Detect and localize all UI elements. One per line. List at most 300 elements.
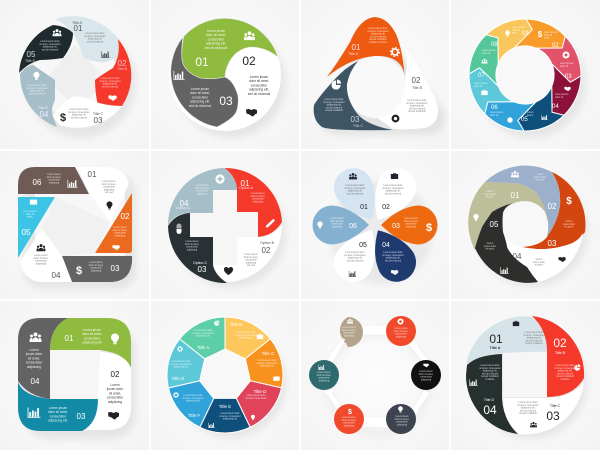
segment 02: Lorem ipsum dolor [100,77,120,80]
segment 01: tempor incididunt [525,342,543,345]
segment 02: sit amet, consectetur [554,367,576,370]
wedge texts and icons: Lorem ipsum dolor [246,394,266,397]
ring segments [457,7,593,143]
wedge titles: Title C [262,351,275,356]
petal texts: sed do eiusmod [347,193,364,195]
petal numbers [349,204,400,249]
petal texts [330,184,418,262]
segment 03 [168,213,227,283]
wedge texts and icons: sit amet, consectetur [256,362,278,365]
segment labels: 08 [491,42,498,48]
segment 01: Lorem [487,190,493,193]
segment 01: 01 [195,55,209,69]
icons and captions: dolor sit [544,34,552,37]
segment 02: sed do eiusmod [557,373,574,375]
node: slate: adipiscing [397,424,408,426]
segment 03: dolor sit amet, [185,243,200,246]
segment 02 [485,166,560,237]
segment 05: sit amet, [486,248,495,251]
petal numbers: 02 [382,204,390,211]
segment 01: 01 [489,332,503,346]
segment 02: sed do eiusmod [409,108,426,110]
segment 03: sit amet, [565,226,574,229]
segment 01: Lorem ipsum [102,180,116,183]
segment 03: Lorem ipsum [89,261,103,264]
segment 03: tempor incididunt [325,109,343,112]
segment 04: ipsum dolor [533,261,545,264]
segment 01: dolor sit amet, [206,33,226,37]
segment 01: 01 [74,24,83,33]
segment 06 [18,167,89,194]
segment 01: Lorem ipsum [251,192,265,195]
segment 03: Option C [193,261,207,265]
wedge titles: Title A [197,345,209,350]
icons and captions: Lorem ipsum [560,62,573,65]
panel: five-step pinwheel circle [19,16,136,138]
node: tan: dolor sit amet, [342,329,357,332]
panel: six-petal flower [312,161,438,289]
segment 03 [314,61,393,130]
node: slate [386,404,416,434]
segment 06: consectetur [48,179,60,182]
segment 03: Lorem ipsum [191,87,210,91]
icons and captions: $ [538,30,543,39]
segment 04: Lorem ipsum [34,254,48,257]
petal texts: dolor sit amet [330,220,344,223]
segment 02: 02 [111,370,120,379]
segment 01 [466,316,547,365]
segment 01: adipiscing elit, [88,38,103,41]
segment 06: 06 [33,178,42,187]
segment 01: consectetur [84,336,101,340]
segment 02: elit, sed [247,264,256,267]
icons and captions: ipsum [527,115,533,117]
wedge titles: Title F [188,413,200,418]
segment 01: Lorem ipsum dolor [85,32,105,35]
segment 05: 05 [27,50,36,59]
petal texts: sit amet, consectetur [382,254,404,257]
segment 04 [20,65,57,127]
segment 01: 01 [241,179,250,188]
segment 05: dolor sit [26,213,34,216]
segment 02: ipsum dolor [534,176,546,179]
segment 03: 03 [198,265,207,274]
wedge texts and icons: Lorem ipsum dolor [257,359,277,362]
segment 02: 02 [262,246,271,255]
petal texts: sed do eiusmod [347,260,364,262]
segment 02: sed do eiusmod [102,86,119,88]
segment 03: 03 [219,94,233,108]
segment 01: 01 [65,334,74,343]
segment 02: adipiscing [115,235,126,237]
segment 01 [468,182,549,250]
node: black: adipiscing [421,379,432,381]
segment 01: consectetur [208,37,225,41]
segment 02: Lorem ipsum dolor [407,99,427,102]
segment 03: Title C [550,404,561,408]
panel: three-step yin-yang circle [169,18,286,138]
petal texts: adipiscing elit, [386,257,401,260]
segment labels: 04 [552,104,559,110]
segment 02 [95,193,132,253]
segment 05: Title E [25,59,36,63]
petal numbers: 04 [382,242,390,249]
petal numbers: 06 [349,223,357,230]
petal icons: $ [426,222,432,234]
icons and captions: Lorem ipsum [555,93,568,96]
segment 04: consectetur [196,190,208,193]
segment 03: consectetur [192,95,209,99]
segment 04: sit amet, [535,264,544,267]
segment 04 [503,232,583,282]
petal texts: dolor sit amet [404,220,418,223]
panel: six-step rounded iris square [18,167,136,289]
node: tan: Lorem ipsum [342,326,356,329]
wedge texts and icons: Lorem ipsum dolor [171,360,191,363]
segment 04 [18,318,68,399]
petal texts: Lorem ipsum dolor [383,251,403,254]
panel: three-step rounded triangle [314,17,445,135]
petal texts: adipiscing elit, [386,190,401,193]
segment 01 [77,167,129,222]
segment 04: 04 [52,271,61,280]
segment 01: sit amet, consectetur [367,30,389,33]
segment 03: $ [566,196,572,207]
segment 03: 03 [548,239,557,248]
segment 01: Lorem ipsum [207,29,226,33]
segment 04: 04 [31,377,40,386]
segment 01: elit, sed [105,191,114,194]
wedge texts and icons: adipiscing elit, [260,365,275,368]
segment 03: sit amet, consectetur [68,111,90,114]
segment 01 [182,18,278,79]
segment 04: Lorem [29,348,39,352]
petal texts: adipiscing [406,226,417,228]
segment 05: sed do eiusmod [42,49,59,51]
segment 04: adipiscing elit, [30,90,45,93]
segment 02: 02 [553,336,567,350]
segment 02: dolor sit amet, [249,79,269,83]
wedge texts and icons: sit amet, consectetur [245,397,267,400]
segment 05: sit amet, consectetur [39,43,61,46]
segment 04: adipiscing [36,263,47,265]
segment 02: adipiscing elit, [410,105,425,108]
segment 01: sit amet, consectetur [523,334,545,337]
segment 01: Lorem ipsum dolor [368,27,388,30]
segment 01: Lorem ipsum [83,328,102,332]
segment 02: consectetur [251,83,268,87]
connecting arrows [324,322,431,430]
node: teal: Lorem ipsum [317,371,331,374]
segment 02: 02 [412,76,421,85]
segment 05: 05 [22,228,31,237]
segment 02: sed do eiusmod [248,92,270,96]
segment 02 [213,225,282,282]
segment 05: Lorem [487,242,493,245]
wedge texts and icons: Lorem ipsum dolor [193,329,213,332]
petal numbers: 05 [359,242,367,249]
wedge texts and icons: adipiscing elit, [196,335,211,338]
segment 03: $ [60,112,66,124]
node: teal: dolor sit amet, [317,374,332,377]
segment 02: adipiscing [246,262,257,264]
segment 01: 01 [352,43,361,52]
segment 01: adipiscing elit, [371,33,386,36]
petal texts: adipiscing elit, [348,190,363,193]
node: black: consectetur [420,376,432,379]
petals [312,161,438,289]
segment 04: adipiscing [197,193,208,195]
segment 01: adipiscing elit, [206,42,226,46]
wedge texts and icons [170,320,280,428]
segment 01: adipiscing [253,201,264,203]
segment 04: dolor sit amet, [195,187,210,190]
petal texts: consectetur [331,223,343,226]
petal texts: consectetur [405,223,417,226]
segment 03: Lorem [566,220,572,223]
segment 05: Lorem ipsum dolor [40,40,60,43]
segment 04: ipsum dolor [26,352,43,356]
segment 02: Option B [260,241,275,245]
segment 01: adipiscing elit, [527,337,542,340]
node: black: dolor sit amet, [419,373,434,376]
segment 04: adipiscing elit, [483,370,498,373]
segment 04: 04 [180,199,189,208]
segment 03: $ [76,265,82,277]
wedge texts and icons: sit amet, consectetur [170,363,192,366]
segment 01: adipiscing [104,189,115,191]
segment 01: dolor sit amet, [82,332,102,336]
segment 02: Lorem [110,383,120,387]
segment 02: 02 [118,59,127,68]
petal texts: sed do eiusmod [385,193,402,195]
segment 01: adipiscing elit [82,341,102,345]
segment 02 [169,19,281,131]
segment 03 [53,96,122,128]
segment 02: 02 [548,202,557,211]
petal texts: Lorem ipsum [330,217,344,220]
segment 03: Title C [353,124,364,128]
segment labels: 01 [522,31,529,37]
segment 03: consectetur [90,267,102,270]
segment 01: Title A [348,52,359,56]
segment labels: 06 [491,105,498,111]
icons and captions: dolor sit [474,85,482,88]
segment 01: dolor sit amet, [102,183,117,186]
wedge titles: Title E [219,404,231,409]
petal texts: sit amet, consectetur [344,254,366,257]
wedge texts and icons: sit amet, consectetur [192,332,214,335]
segment 02: adipiscing elit, [103,83,118,86]
segment 02: 02 [242,54,256,68]
panel: seven-wedge ring [158,303,299,447]
segment 04: 04 [40,110,49,119]
segment 02: dolor sit amet, [113,229,128,232]
node: red bottom: Lorem ipsum [342,416,356,419]
segment 01 [327,17,405,81]
segment 01: ut labore et dolore [369,41,388,44]
segment 02: tempor incididunt [408,110,426,113]
wedge titles: Title D [254,389,267,394]
segment 01: 01 [88,170,97,179]
node: slate: consectetur [396,421,408,424]
segment 02: consectetur [114,232,126,235]
segment labels: 02 [552,43,559,49]
segment 02: adipiscing [108,400,122,404]
wedge texts and icons: adipiscing elit, [223,418,238,421]
segment 03 [62,256,132,282]
panel: six-node arrow cycle [309,316,441,434]
segment 03: consectetur [50,414,67,418]
icons and captions: Lorem ipsum [490,111,503,114]
segment 03: 03 [351,115,360,124]
segment 03: sit amet, consectetur [517,404,539,407]
segment 05: adipiscing elit, [43,46,58,49]
segment 02: Title B [412,86,423,90]
panel: five-blade swirl [468,166,588,287]
segment 04 [466,354,518,434]
petal texts: Lorem ipsum [404,217,418,220]
segment 03: 03 [77,412,86,421]
segment 04: sit amet, consectetur [479,367,501,370]
segment 04: consectetur [26,361,43,365]
ring wedges [158,303,299,447]
segment 02: Lorem ipsum [244,253,258,256]
wedge titles: Title G [171,376,185,381]
segment 03: tempor incididunt [519,412,537,415]
icons and captions: dolor sit [482,52,490,55]
segment 03: adipiscing elit, [327,104,342,107]
panel: medical cross circle [168,168,286,288]
segment 02: adipiscing elit, [558,370,573,373]
segment labels: 05 [521,117,528,123]
segment 03 [171,37,238,127]
node: teal: adipiscing [319,380,330,382]
wedge titles [171,322,275,418]
wedge titles: Title B [230,322,242,327]
segment 02: Title B [555,351,566,355]
segment 01: tempor incididunt [369,38,387,41]
segment 01: ipsum dolor [484,193,496,196]
icons and captions: Lorem ipsum [482,49,495,52]
segment 03: Lorem ipsum [49,406,68,410]
segment 05 [19,25,73,73]
segment 04: sit amet, [28,356,40,360]
node: red top: adipiscing [396,336,407,338]
icons and captions: dolor sit [512,29,520,32]
segment 04: sit amet, consectetur [26,87,48,90]
segment labels: 03 [565,74,572,80]
segment 03 [522,172,585,249]
segment 04 [20,229,72,282]
segment 03: 03 [546,409,560,423]
segment 04: Lorem ipsum dolor [27,84,47,87]
icons and captions: dolor sit [555,96,563,99]
node: red top: Lorem ipsum [394,327,408,330]
segment 03: Lorem ipsum dolor [69,108,89,111]
segment 01: dolor sit amet, [251,195,266,198]
icons and captions: dolor sit [560,65,568,68]
wedge texts and icons: adipiscing elit, [239,337,254,340]
segment 03: dolor sit amet, [89,264,104,267]
segment 06: Lorem ipsum [47,173,61,176]
segment 04: Option D [176,206,190,210]
segment 03: adipiscing [187,249,198,251]
icons and captions: Lorem ipsum [474,82,487,85]
segment 01: sed do eiusmod [205,46,227,50]
segment 03: sed do eiusmod [326,107,343,109]
segment 01: sit amet, consectetur [84,35,106,38]
segment 05 [475,202,538,283]
segment 03: 03 [111,264,120,273]
segment 04: Title D [38,106,49,110]
segment 02: sit amet, [536,179,545,182]
segment 01: Option A [239,186,253,190]
segment 03: adipiscing elit. [48,419,68,423]
segment 04: 04 [483,403,497,417]
segment 02: ut labore [561,378,570,381]
segment 02: tempor incididunt [556,375,574,378]
segment 04: 04 [513,252,522,261]
node: red top: consectetur [395,333,407,336]
segment 02: adipiscing elit, [249,88,269,92]
icons and captions: dolor sit [490,114,498,117]
node: red bottom [334,404,364,434]
cross centre [190,190,258,265]
node: slate: dolor sit amet, [395,418,410,421]
segment 05: amet, [27,216,33,219]
petal texts: adipiscing elit, [348,257,363,260]
segment 02: sit amet, consectetur [99,80,121,83]
segment labels [478,31,572,123]
icons and captions: amet [512,32,517,35]
segment 02: sit amet, [109,391,121,395]
node: red top [386,316,416,346]
segment 01: sed do eiusmod [87,41,104,43]
segment 02: consectetur [107,396,124,400]
segment 03: Lorem ipsum dolor [324,98,344,101]
segment 01: Title A [72,21,83,25]
segment 01: sit amet, [486,196,495,199]
node: red top: dolor sit amet, [394,330,409,333]
segment 03: adipiscing elit, [72,114,87,117]
segment 03: consectetur [186,246,198,249]
panel: four-step rounded square [18,318,136,439]
petal numbers: 01 [360,204,368,211]
segment 03: dolor sit amet, [48,410,68,414]
segment 05: 05 [490,220,499,229]
node: black [411,360,441,390]
segment 03: sed do eiusmod [189,104,211,108]
segment 02: consectetur [245,259,257,262]
wedge texts and icons: adipiscing elit, [186,400,201,403]
segment 05: Lorem ipsum [23,210,37,213]
wedge texts and icons: sit amet, consectetur [235,334,257,337]
icons and captions: Lorem [527,111,534,114]
segment 02: Lorem ipsum [250,75,269,79]
segment 01: consectetur [103,186,115,189]
segment 02 [376,47,438,129]
petal texts: sit amet, consectetur [382,187,404,190]
segment 04: consectetur [35,260,47,263]
segment 04: sed do eiusmod [482,373,499,375]
wedge texts and icons: sit amet, consectetur [219,415,241,418]
node: red bottom: dolor sit amet, [342,419,357,422]
segment 04: Lorem ipsum dolor [480,364,500,367]
segment 03: adipiscing [91,270,102,272]
segment 03: sit amet, consectetur [323,101,345,104]
petal texts: adipiscing [332,226,343,228]
